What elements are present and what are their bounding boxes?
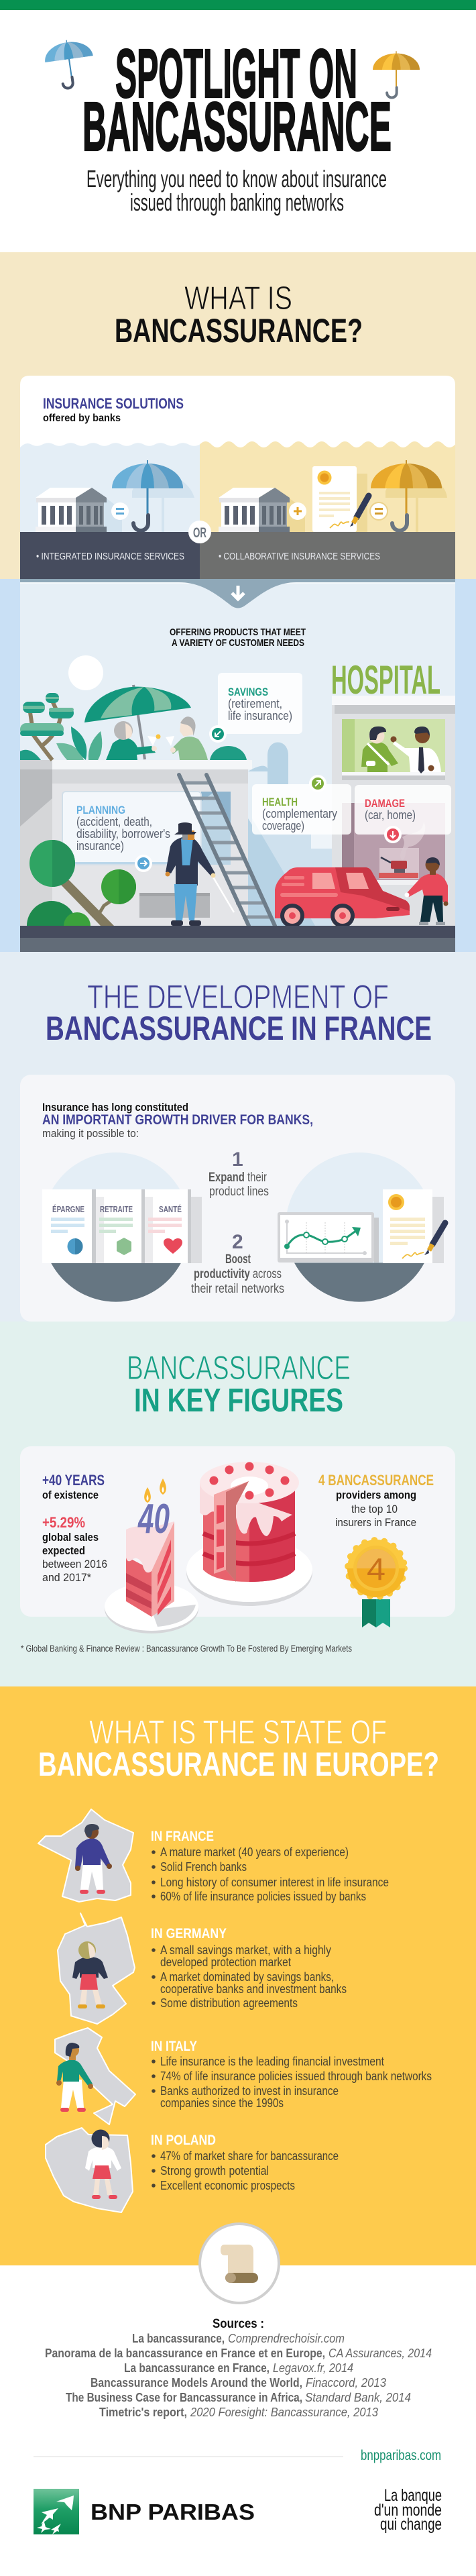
text block: in Poland: IN POLAND xyxy=(151,2133,216,2148)
elderly woman xyxy=(106,721,157,760)
heading: development of bancassurance in France: THE DEVELOPMENT OF xyxy=(87,978,389,1016)
stat: global sales growth: between 2016 xyxy=(42,1558,107,1570)
document: épargne xyxy=(42,1189,96,1263)
sources: Sources : xyxy=(213,2317,264,2331)
document: retraite xyxy=(96,1189,145,1263)
icon: equals sign xyxy=(111,502,129,520)
text: growth driver intro xyxy=(42,1101,313,1140)
text block: in Italy: IN ITALY xyxy=(151,2039,197,2054)
text: boost productivity: productivity across xyxy=(194,1267,282,1281)
sources: Finaccord, 2013 xyxy=(306,2376,386,2390)
ladder xyxy=(179,775,275,926)
stat: global sales growth: expected xyxy=(42,1544,85,1557)
badge: savings arrow xyxy=(209,725,227,743)
website link text: bnpparibas.com xyxy=(361,2448,441,2463)
sources: La bancassurance en France, xyxy=(124,2361,270,2375)
text: offering products xyxy=(170,627,306,649)
text: insurance solutions heading: offered by banks xyxy=(43,413,121,424)
text: growth driver intro: Insurance has long constituted xyxy=(42,1101,188,1114)
illustration: product documents xyxy=(42,1152,202,1302)
stat: global sales growth: global sales xyxy=(42,1531,99,1544)
icon: yellow umbrella xyxy=(373,51,420,98)
section background: development in France xyxy=(0,952,476,1322)
text: offering products: OFFERING PRODUCTS THAT MEET xyxy=(170,627,306,638)
text block: in Italy: Banks authorized to invest in insurance xyxy=(160,2084,339,2098)
text: expand product lines xyxy=(209,1148,269,1199)
text block: in Italy: Life insurance is the leading financial investment xyxy=(160,2055,384,2068)
panel side: collaborative services background xyxy=(200,441,455,532)
card: health: HEALTH xyxy=(262,796,298,808)
text: expand product lines: 1 xyxy=(232,1148,243,1171)
card: damage xyxy=(355,785,451,843)
document: santé: SANTÉ xyxy=(159,1204,182,1214)
icon: medal: 4 xyxy=(367,1552,385,1587)
stat: bancassurance providers: insurers in France xyxy=(335,1516,416,1529)
sources: La bancassurance, xyxy=(132,2332,225,2345)
document: santé xyxy=(145,1189,202,1263)
card: savings: life insurance) xyxy=(228,709,292,722)
card: health: coverage) xyxy=(262,819,304,833)
card: health xyxy=(252,775,351,835)
card: planning: PLANNING xyxy=(76,804,125,816)
sources: CA Assurances, 2014 xyxy=(329,2347,432,2360)
section background: what is bancassurance xyxy=(0,252,476,579)
text: boost productivity: their retail networks xyxy=(191,1282,284,1296)
badge: damage arrow xyxy=(384,826,402,843)
hospital building xyxy=(331,657,455,926)
band: collaborative insurance services: • COLLABORATIVE INSURANCE SERVICES xyxy=(219,551,380,562)
text block: in Poland xyxy=(151,2133,339,2192)
tablet chart xyxy=(278,1212,379,1263)
text block: in Italy: 74% of life insurance policies issued through bank networks xyxy=(160,2070,432,2083)
illustration: roof garden xyxy=(20,685,247,760)
stat: 40 years of existence: +40 YEARS xyxy=(42,1472,105,1489)
footnote: * Global Banking & Finance Review : Bancassurance Growth To Be Fostered By Emerging Markets xyxy=(21,1643,352,1654)
text block: in France: Solid French banks xyxy=(160,1860,247,1874)
card: savings: SAVINGS xyxy=(228,686,268,698)
shadow shapes behind buildings xyxy=(248,742,332,926)
icon: plus sign xyxy=(289,502,306,520)
text: expand product lines: product lines xyxy=(209,1185,269,1199)
stat: 40 years of existence xyxy=(42,1472,105,1501)
card: planning xyxy=(62,792,201,872)
illustration: birthday cake xyxy=(186,1462,312,1606)
sources: Bancassurance Models Around the World, xyxy=(91,2376,302,2390)
sources: Panorama de la bancassurance en France et en Europe, xyxy=(45,2347,325,2360)
illustration: Italy map with man xyxy=(55,2028,135,2125)
badge: health arrow xyxy=(309,775,326,792)
band: collaborative insurance services xyxy=(200,532,455,579)
text: boost productivity xyxy=(191,1231,284,1296)
badge: or: OR xyxy=(193,525,206,541)
text block: in France: IN FRANCE xyxy=(151,1829,214,1844)
text block: in France: 60% of life insurance policies issued by banks xyxy=(160,1890,366,1903)
candle 40: 40 xyxy=(137,1496,170,1542)
heading: development of bancassurance in France xyxy=(46,978,432,1047)
plants xyxy=(56,727,102,760)
icon: equals sign xyxy=(370,502,388,520)
text: insurance solutions heading xyxy=(43,395,184,424)
sources: Comprendrechoisir.com xyxy=(228,2332,345,2345)
heading: key figures xyxy=(127,1349,351,1419)
building with roof terrace xyxy=(20,760,252,926)
subtitle xyxy=(86,165,387,216)
text block: in France xyxy=(151,1829,389,1903)
sun xyxy=(68,655,103,690)
text block: in Poland: Strong growth potential xyxy=(160,2164,269,2178)
section background: customer needs xyxy=(0,579,476,952)
heading: key figures: BANCASSURANCE xyxy=(127,1349,351,1387)
logo: BNP Paribas: BNP PARIBAS xyxy=(91,2500,255,2524)
panel: growth driver xyxy=(20,1075,455,1322)
text block: in Germany: A small savings market, with a highly xyxy=(160,1943,331,1957)
card: damage: (car, home) xyxy=(365,808,416,822)
icon: medal xyxy=(347,1540,405,1627)
bush xyxy=(210,746,247,760)
hospital window: kitchen damage xyxy=(342,803,445,885)
illustration: cake slice with candle xyxy=(105,1479,198,1633)
logo: BNP Paribas xyxy=(34,2489,255,2534)
man with hat and cane xyxy=(165,822,234,926)
text block: in Poland: 47% of market share for bancassurance xyxy=(160,2149,339,2163)
card: health: (complementary xyxy=(262,807,337,820)
illustration: Poland map with woman xyxy=(46,2128,133,2212)
icon: scroll in circle xyxy=(200,2224,279,2303)
text block: in Germany: IN GERMANY xyxy=(151,1926,227,1941)
cocktail glasses xyxy=(147,734,174,746)
text block: in France: A mature market (40 years of experience) xyxy=(160,1845,349,1859)
icon: contract with pen xyxy=(312,466,369,532)
illustration: chart and contract xyxy=(278,1152,445,1302)
stat: bancassurance providers xyxy=(318,1472,434,1529)
illustration: bank plus contract equals umbrella xyxy=(219,460,447,532)
sources: Timetric's report, xyxy=(99,2406,187,2419)
tagline: d'un monde xyxy=(374,2501,442,2520)
red car xyxy=(275,867,410,928)
tagline: qui change xyxy=(380,2515,442,2534)
band: integrated insurance services xyxy=(20,532,200,579)
bonsai tree xyxy=(20,693,74,760)
text block: in Italy: companies since the 1990s xyxy=(160,2096,284,2110)
stat: global sales growth: and 2017* xyxy=(42,1571,91,1584)
stat: global sales growth xyxy=(42,1514,107,1584)
man in red sweater xyxy=(405,857,448,925)
heading: what is bancassurance xyxy=(115,280,363,350)
stat: bancassurance providers: the top 10 xyxy=(351,1503,398,1515)
illustration: bank equals umbrella xyxy=(36,460,194,532)
text: offering products: A VARIETY OF CUSTOMER NEEDS xyxy=(172,637,304,649)
text: expand product lines: Expand their xyxy=(209,1171,267,1185)
title xyxy=(82,35,392,165)
heading: what is bancassurance: BANCASSURANCE? xyxy=(115,312,363,350)
document: épargne: ÉPARGNE xyxy=(52,1204,84,1214)
top green bar xyxy=(0,0,476,10)
illustration: France map with man xyxy=(38,1809,133,1902)
green parasol xyxy=(84,685,191,759)
tagline xyxy=(374,2486,442,2534)
panel side: integrated services background xyxy=(20,443,200,532)
sources: Standard Bank, 2014 xyxy=(305,2391,411,2404)
street xyxy=(20,926,455,952)
sources: 2020 Foresight: Bancassurance, 2013 xyxy=(190,2406,378,2419)
panel: insurance solutions xyxy=(20,376,455,579)
text block: in Poland: Excellent economic prospects xyxy=(160,2179,295,2192)
stat: 40 years of existence: of existence xyxy=(42,1489,99,1501)
text: insurance solutions heading: INSURANCE SOLUTIONS xyxy=(43,395,184,412)
sources xyxy=(45,2317,432,2419)
heading: state of bancassurance in Europe: WHAT IS THE STATE OF xyxy=(89,1713,387,1751)
text block: in Germany xyxy=(151,1926,347,2010)
text block: in Germany: A market dominated by savings banks, xyxy=(160,1970,334,1984)
subtitle: issued through banking networks xyxy=(130,189,344,216)
card: damage: DAMAGE xyxy=(365,797,405,810)
panel: customer needs scene xyxy=(20,579,455,952)
band: integrated insurance services: • INTEGRATED INSURANCE SERVICES xyxy=(36,551,184,562)
heading: state of bancassurance in Europe xyxy=(38,1713,439,1783)
text block: in Germany: cooperative banks and investment banks xyxy=(160,1982,347,1996)
stat: bancassurance providers: providers among xyxy=(336,1489,416,1501)
badge: or xyxy=(188,521,211,543)
document: retraite: RETRAITE xyxy=(100,1204,133,1214)
tagline: La banque xyxy=(384,2486,442,2505)
stat: bancassurance providers: 4 BANCASSURANCE xyxy=(318,1472,434,1489)
card: planning: (accident, death, xyxy=(76,815,152,828)
hospital window: doctor and patient xyxy=(342,719,445,780)
text: boost productivity: Boost xyxy=(225,1252,251,1267)
section background: key figures xyxy=(0,1322,476,1686)
heading: what is bancassurance: WHAT IS xyxy=(184,280,292,317)
elderly man xyxy=(170,716,208,760)
sources: The Business Case for Bancassurance in Africa, xyxy=(66,2391,302,2404)
text: growth driver intro: making it possible to: xyxy=(42,1127,139,1140)
contract with pen xyxy=(383,1189,445,1263)
card: savings: (retirement, xyxy=(228,697,282,710)
trees xyxy=(27,840,136,926)
panel: key figures xyxy=(20,1446,455,1617)
text block: in Italy xyxy=(151,2039,432,2110)
illustration: Germany map with woman xyxy=(58,1913,135,2024)
text block: in France: Long history of consumer interest in life insurance xyxy=(160,1876,389,1889)
arrow tab xyxy=(20,579,455,608)
card: planning: disability, borrower's xyxy=(76,827,170,841)
text block: in Germany: Some distribution agreements xyxy=(160,1996,298,2010)
badge: planning arrow xyxy=(135,855,152,872)
heading: key figures: IN KEY FIGURES xyxy=(134,1383,343,1419)
card: planning: insurance) xyxy=(76,839,124,853)
text: growth driver intro: AN IMPORTANT GROWTH DRIVER FOR BANKS, xyxy=(42,1112,313,1128)
text: boost productivity: 2 xyxy=(232,1231,243,1253)
card: savings xyxy=(209,673,302,743)
section background: Europe xyxy=(0,1686,476,2265)
stat: global sales growth: +5.29% xyxy=(42,1514,85,1531)
candle 40 xyxy=(137,1479,170,1542)
text block: in Germany: developed protection market xyxy=(160,1955,291,1969)
icon: blue umbrella xyxy=(42,37,97,91)
sources: Legavox.fr, 2014 xyxy=(273,2361,353,2375)
